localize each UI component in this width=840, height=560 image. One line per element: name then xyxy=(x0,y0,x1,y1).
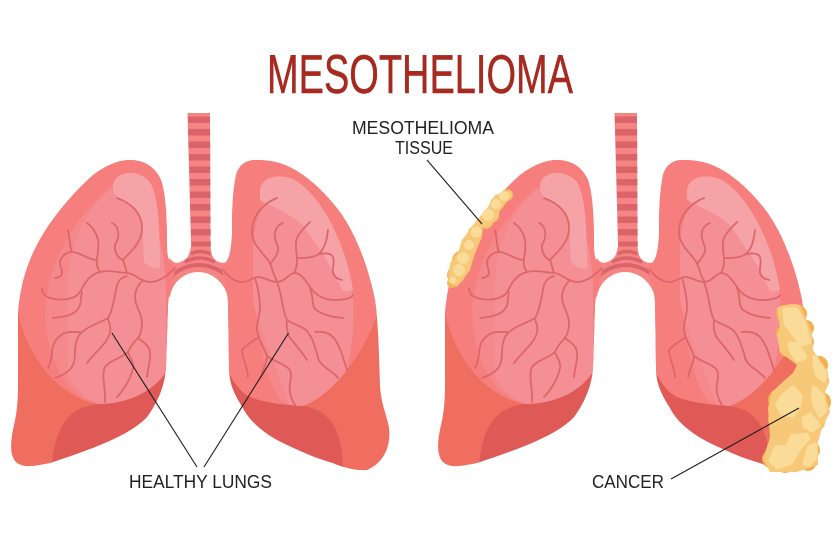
label: cancer: CANCER xyxy=(592,472,664,492)
healthy lungs illustration xyxy=(0,113,400,480)
left lobe xyxy=(0,150,185,480)
right lobe xyxy=(215,150,400,480)
diseased lungs illustration xyxy=(427,113,827,480)
label: mesothelioma tissue: MESOTHELIOMA xyxy=(352,118,494,138)
trachea xyxy=(160,113,238,297)
label: mesothelioma tissue: TISSUE xyxy=(395,138,453,158)
leader line: cancer xyxy=(671,408,799,479)
mesothelioma tissue tumor xyxy=(447,189,513,288)
cancer tumor xyxy=(762,304,831,473)
label: healthy lungs: HEALTHY LUNGS xyxy=(129,472,272,492)
leader lines: healthy lungs xyxy=(112,333,288,467)
label: mesothelioma tissue xyxy=(352,118,494,158)
title: MESOTHELIOMA xyxy=(267,43,573,105)
leader line: mesothelioma tissue xyxy=(427,160,482,224)
